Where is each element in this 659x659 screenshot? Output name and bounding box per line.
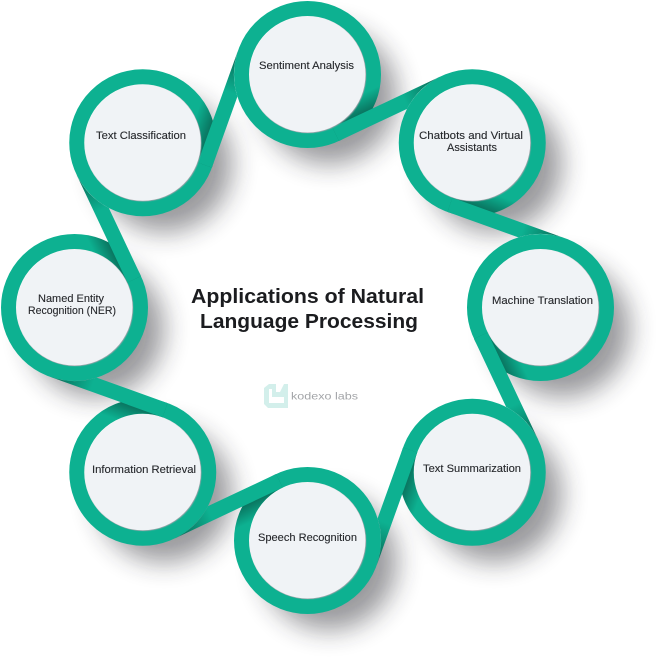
node: chatbots and virtual assistants: Assistants (447, 142, 497, 154)
node: named entity recognition: Recognition (NER) (28, 305, 116, 317)
node: text summarization (414, 414, 531, 531)
ribbon: machine translation to text summarization (474, 332, 552, 441)
node: text classification (85, 85, 201, 201)
node: chatbots and virtual assistants (414, 85, 531, 201)
node: text summarization: Text Summarization (423, 463, 521, 475)
ribbon: information retrieval to named entity recognition (40, 331, 172, 463)
node: speech recognition (250, 482, 366, 599)
ribbon: named entity recognition to text classification (63, 174, 141, 283)
ribbon: sentiment to chatbots (332, 63, 441, 141)
node: chatbots and virtual assistants: Chatbots and Virtual (419, 130, 523, 142)
title: Applications of Natural (191, 286, 424, 308)
node: speech recognition: Speech Recognition (258, 532, 357, 544)
ribbon: text summarization to speech recognition (331, 443, 463, 575)
node: information retrieval: Information Retrieval (92, 464, 196, 476)
title: Language Processing (200, 311, 418, 333)
node: sentiment analysis (250, 16, 366, 133)
title (191, 286, 424, 333)
ribbon: speech recognition to information retrieval (174, 474, 283, 552)
node: sentiment analysis: Sentiment Analysis (259, 60, 355, 72)
logo: kodexo labs: kodexo labs (291, 390, 358, 402)
node: text classification: Text Classification (96, 130, 186, 142)
ribbon: text classification to sentiment (152, 40, 284, 172)
ribbon: chatbots to machine translation (443, 152, 575, 284)
logo: kodexo labs (264, 384, 358, 408)
node: machine translation (482, 250, 599, 366)
node: named entity recognition: Named Entity (38, 293, 104, 305)
node: named entity recognition (16, 250, 133, 366)
node: machine translation: Machine Translation (492, 295, 593, 307)
node: information retrieval (85, 414, 201, 531)
